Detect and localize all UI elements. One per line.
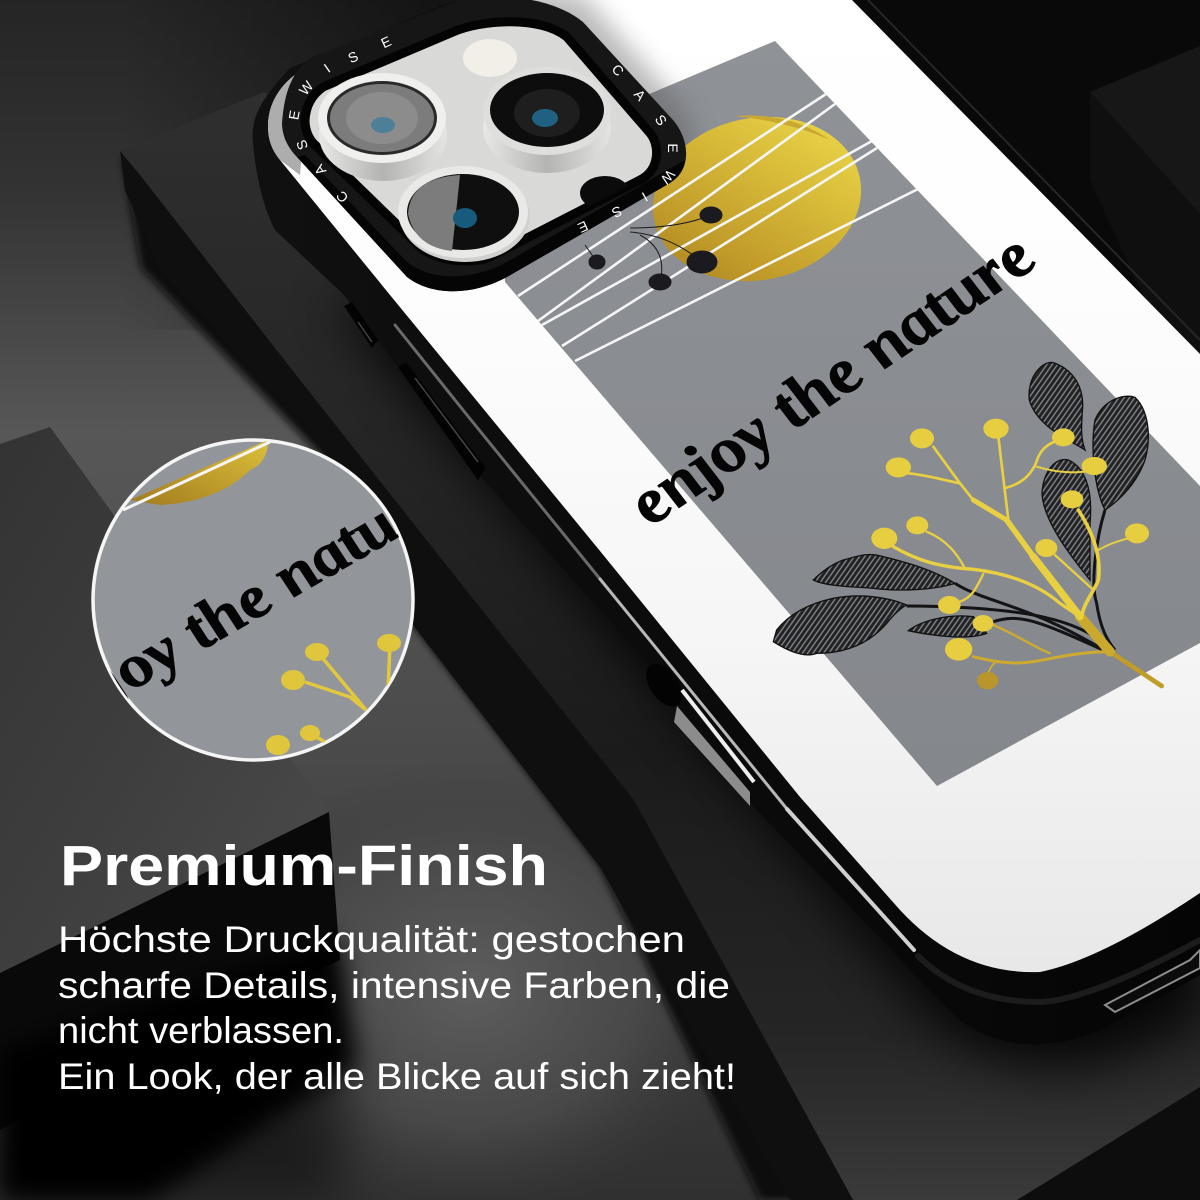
case edge highlights <box>395 325 1200 1002</box>
heading: Premium-Finish <box>60 834 548 898</box>
ring outer black lower rim <box>297 155 685 291</box>
magnifier slogan: joy the nature <box>68 464 464 715</box>
print: slogan: enjoy the nature <box>607 223 1053 536</box>
button highlights <box>358 322 478 462</box>
print: gold sun <box>637 98 877 300</box>
body copy: nicht verblassen. <box>58 1010 344 1051</box>
casewise ring text: I <box>321 60 333 76</box>
microphone hole <box>580 176 625 204</box>
body copy: scharfe Details, intensive Farben, die <box>58 965 730 1006</box>
casewise ring text: S <box>293 138 311 152</box>
magnifier berries <box>266 634 401 755</box>
casewise ring text: E <box>575 218 591 236</box>
phone back: white print <box>268 0 1200 972</box>
casewise ring text: A <box>631 86 650 104</box>
lens: upper left <box>318 73 447 181</box>
side buttons <box>344 302 486 480</box>
body copy: Höchste Druckqualität: gestochen <box>58 919 685 960</box>
casewise ring text <box>285 33 681 236</box>
print: white lines <box>518 94 918 361</box>
casewise ring text: E <box>285 109 303 121</box>
magnifier detail circle <box>91 438 415 762</box>
casewise ring text: A <box>310 161 329 178</box>
print: gray panel <box>500 41 1200 786</box>
body copy: Ein Look, der alle Blicke auf sich zieht! <box>58 1056 736 1097</box>
corner reflection on white strip <box>268 60 318 175</box>
charging port <box>1105 950 1200 1012</box>
print: black berries <box>585 207 722 290</box>
casewise ring text: S <box>609 203 625 221</box>
lens: bottom <box>398 166 530 262</box>
casewise ring text: E <box>378 33 394 51</box>
flash <box>463 39 517 77</box>
phone drop shadow <box>330 300 1200 1067</box>
casewise ring text: E <box>665 143 681 153</box>
gold branches <box>893 437 1162 686</box>
black leaves <box>773 362 1148 655</box>
camera module <box>282 0 686 291</box>
camera soft shadow on print <box>455 0 700 200</box>
gold berries <box>871 419 1149 689</box>
casewise ring text: C <box>609 61 627 79</box>
silver side key <box>639 657 754 806</box>
casewise ring text: S <box>652 112 670 128</box>
casewise ring text: W <box>296 77 317 98</box>
phone case body <box>253 0 1200 1044</box>
body copy <box>58 919 736 1097</box>
top-right case rim <box>868 0 1200 340</box>
magnifier gold <box>130 440 268 505</box>
camera ring with text band <box>282 0 686 291</box>
ring inner black frame <box>305 22 657 261</box>
black stems <box>907 510 1115 653</box>
print: plant illustration <box>773 362 1162 689</box>
casewise ring text: W <box>657 167 678 188</box>
casewise ring text: S <box>345 48 361 66</box>
casewise ring text: I <box>639 189 651 205</box>
magnifier white line <box>123 442 270 510</box>
lens: upper right <box>483 67 611 173</box>
magnifier branches <box>305 645 390 742</box>
casewise ring text: C <box>333 188 351 206</box>
